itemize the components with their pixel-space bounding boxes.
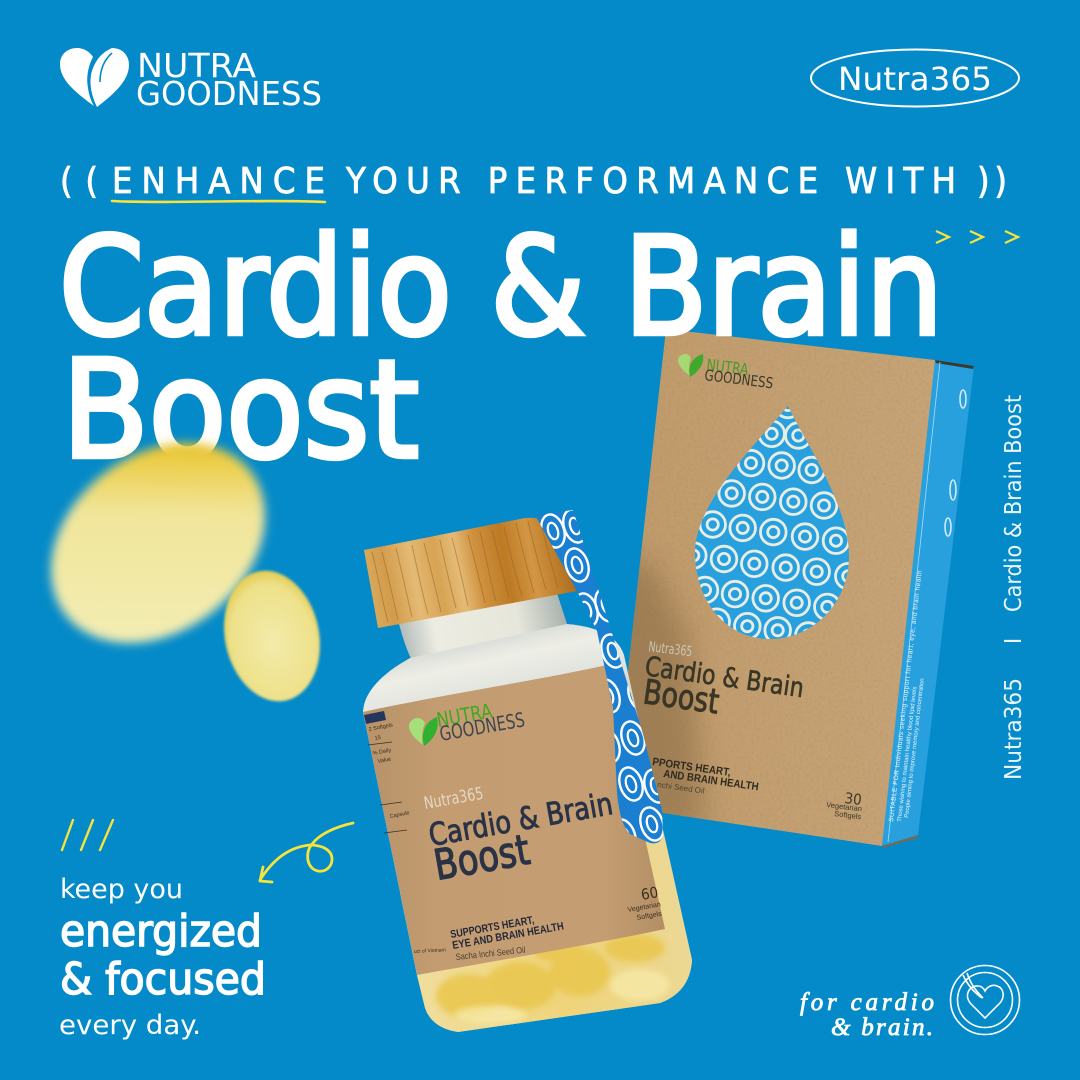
bottle kraft label [363,665,665,975]
tagline: ENHANCE [112,161,325,202]
box product text: Nutra365 [648,639,693,660]
bottle product text: uct of Vietnam [414,947,446,955]
vertical side text: I [1001,638,1027,644]
handwritten note: for cardio [800,989,934,1016]
product: bottle [355,505,700,1040]
vertical side text: Nutra365 [1001,678,1027,780]
box logo [678,354,774,392]
box product text: 30 [844,789,863,809]
bottle product text: Sacha Inchi Seed Oil [455,945,526,962]
bottle body [355,620,700,1040]
blue tear strip seal [535,510,663,844]
yellow slashes [62,820,113,850]
box water-drop window with ring pattern [695,406,849,639]
headline: Boost [62,332,419,490]
box product text: Cardio & Brain [643,651,806,704]
box side panel: People aiming to improve memory and concentration [904,678,926,818]
box product text: Vegetarian [826,800,862,813]
tagline: YOUR PERFORMANCE WITH [345,161,956,202]
badge: Nutra365 [811,50,1019,106]
bottle product text: Cardio & Brain [426,786,616,854]
bottle product text [414,784,663,962]
box product text: Softgels [834,809,862,821]
bottle product text: Softgels [636,911,663,922]
bottle label logo: NUTRA [435,698,495,732]
bottle supplement-facts panel: Capsule [389,810,410,820]
badge: Nutra365: Nutra365 [838,60,992,98]
bottle product text: EYE AND BRAIN HEALTH [451,921,565,952]
product: kraft box [600,325,974,850]
box product text: PPORTS HEART, [652,756,731,779]
bottle wooden cap [364,518,577,628]
bottle product text: SUPPORTS HEART, [449,914,535,941]
bottle product text: Nutra365 [422,784,485,814]
logo: Nutra Goodness: NUTRA [137,46,257,85]
tagline [60,161,1007,202]
bottle supplement-facts panel [364,711,410,833]
body copy: energized [60,906,262,957]
box side panel: SUITABLE FOR Individuals seeking support for heart, eye, and brain health [888,570,924,822]
bottle supplement-facts panel: 2 Softgels [368,722,394,733]
yellow chevrons [936,231,1018,243]
vertical side text: Cardio & Brain Boost [1001,395,1027,612]
handwritten note [800,989,934,1041]
bottle neck [398,590,570,672]
box side panel: Those wishing to maintain healthy blood lipid levels [897,686,918,822]
headline: Cardio & Brain [59,209,943,367]
bottle label logo [409,698,527,746]
body copy: keep you [60,874,183,905]
bottle supplement-facts panel: 15 [374,735,381,742]
handwritten note: & brain. [831,1014,933,1041]
bottle supplement-facts panel: % Daily [372,747,392,757]
arrow: curly yellow [260,823,353,882]
body copy: every day. [59,1010,201,1041]
box logo: NUTRA [706,355,750,379]
bottle product text: Vegetarian [627,901,661,914]
tagline yellow underline [112,201,325,202]
box side panel [882,360,974,848]
bottle product text: 60 [640,883,660,904]
box logo: GOODNESS [704,366,774,392]
box product text [641,639,863,821]
bottle label logo: GOODNESS [438,707,527,746]
box front panel [628,332,935,846]
body copy [59,874,266,1041]
body copy: & focused [60,954,266,1005]
bottle product text: Boost [430,825,533,890]
box product text: nchi Seed Oil [657,780,705,796]
logo: Nutra Goodness [60,46,322,113]
tagline: )) [977,161,1007,202]
bottle supplement-facts panel: Value [377,756,392,765]
logo: Nutra Goodness: GOODNESS [136,74,322,113]
icon: large blurred softgel capsule [12,402,304,684]
icon: heart in rings [950,966,1020,1034]
headline [59,209,943,490]
icon: small softgel capsule [212,562,332,710]
vertical side text [1001,395,1027,780]
tagline: (( [60,161,98,202]
box product text: Boost [641,672,722,722]
box product text: AND BRAIN HEALTH [663,768,759,793]
